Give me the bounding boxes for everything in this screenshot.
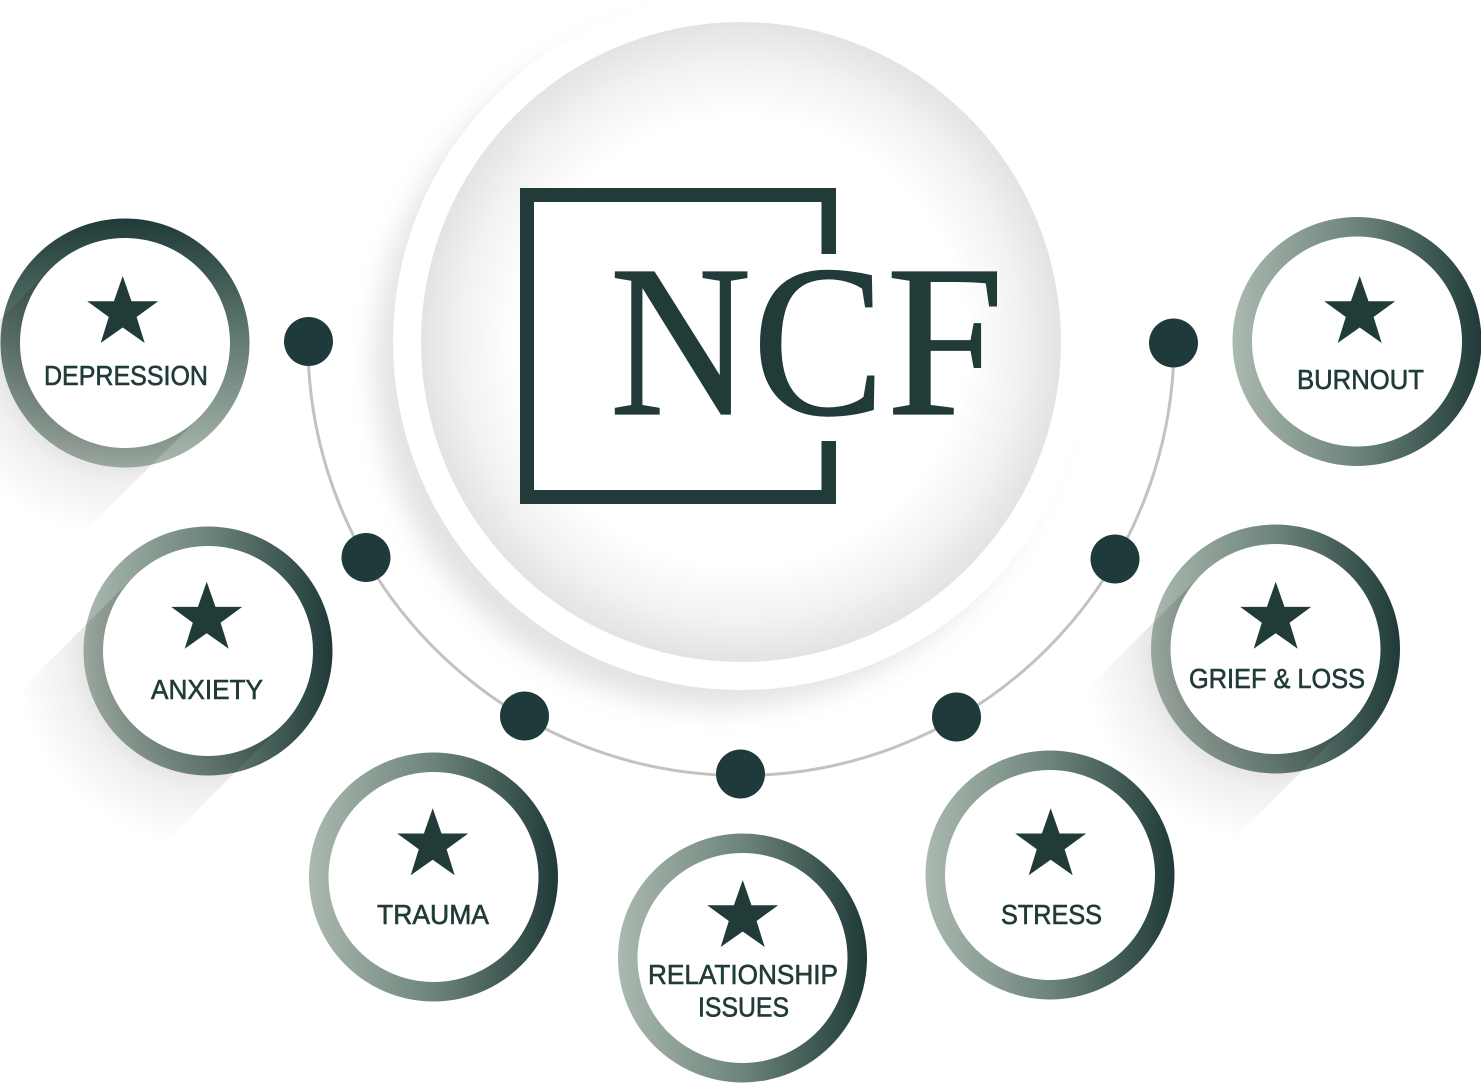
logo letters: N: [610, 221, 751, 461]
ring: depression: [0, 218, 250, 555]
ring: relationship issues: [618, 834, 867, 1082]
logo letters: [610, 221, 1004, 462]
icon: star: [397, 808, 468, 875]
icon: star: [1015, 808, 1086, 875]
label: GRIEF & LOSS: [1189, 663, 1365, 694]
icon: star: [1324, 276, 1395, 343]
center disc with logo: [375, 0, 1089, 708]
ring: trauma: [309, 752, 558, 1002]
label: STRESS: [1001, 899, 1102, 930]
icon: star: [707, 880, 778, 947]
timeline dots: [284, 317, 1198, 798]
icon: star: [1240, 582, 1311, 649]
inner shaded disc: [421, 22, 1061, 662]
icon: star: [171, 582, 242, 649]
ring: grief and loss: [1063, 524, 1400, 861]
label: RELATIONSHIP: [648, 959, 838, 990]
logo: NCF mark: [520, 188, 1004, 504]
icon: star: [87, 276, 158, 343]
label: ANXIETY: [151, 674, 263, 705]
label: TRAUMA: [377, 899, 490, 930]
label: DEPRESSION: [44, 360, 208, 391]
outer white disc: [393, 0, 1089, 690]
logo square bracket: [520, 188, 836, 504]
label: [648, 959, 838, 1022]
label: BURNOUT: [1297, 364, 1424, 395]
ring: stress: [926, 750, 1174, 1000]
logo letters: F: [886, 222, 1004, 462]
label: ISSUES: [698, 992, 789, 1022]
logo letters: C: [752, 221, 885, 461]
connecting arc: [308, 342, 1174, 776]
ring: anxiety: [0, 526, 332, 863]
ring: burnout: [1232, 217, 1481, 466]
disc shadow: [375, 20, 1063, 708]
